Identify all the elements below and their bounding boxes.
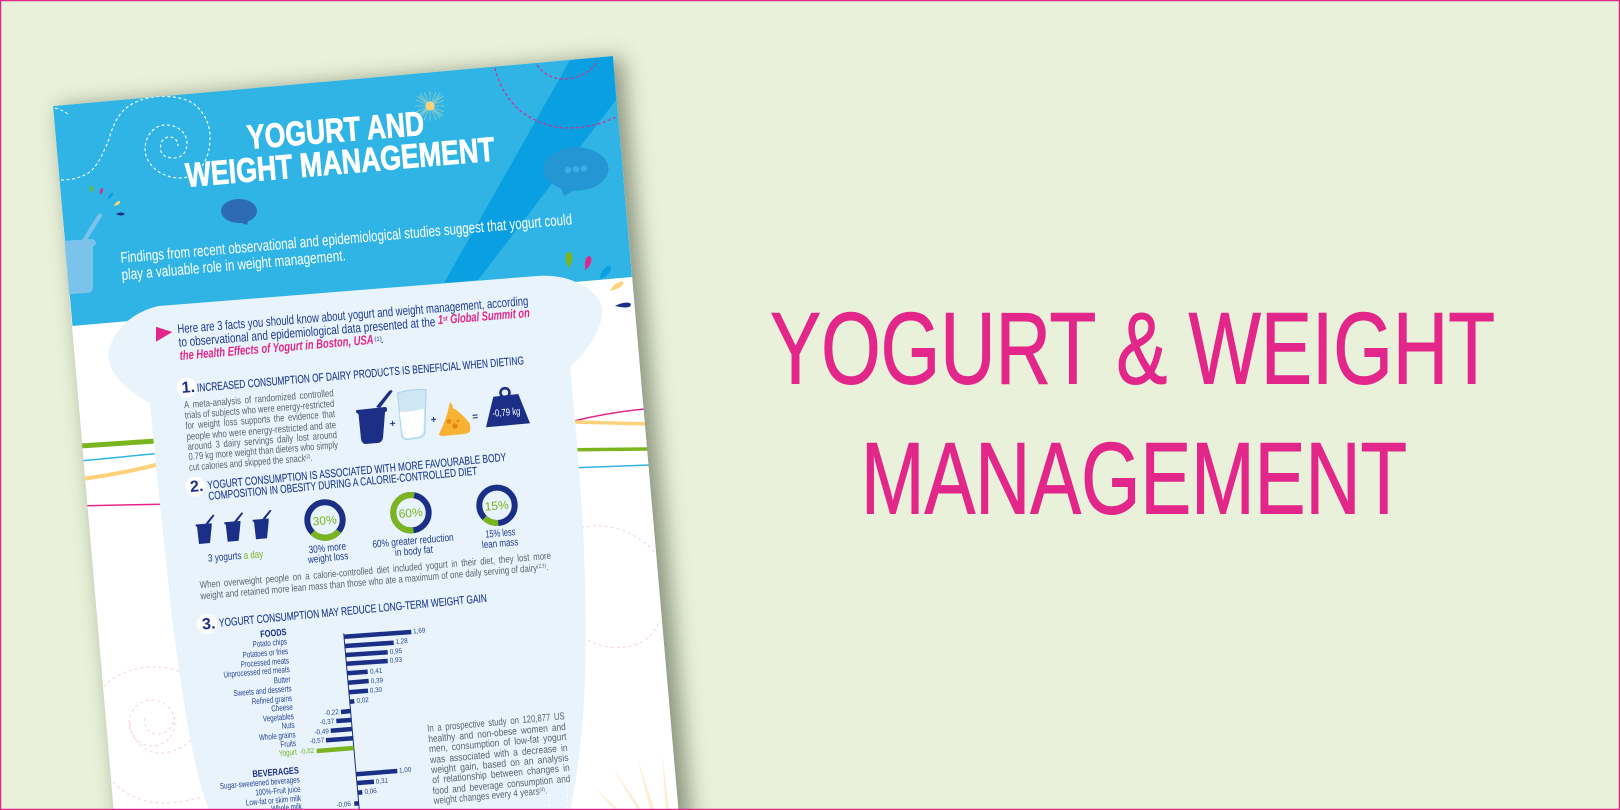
- intro text: to observational and epidemiological data presented at the: [178, 314, 436, 350]
- category labels: FOODS: [260, 626, 287, 639]
- number 1: 1.: [181, 379, 196, 397]
- text block 1: 0.79 kg more weight than dieters who simply: [188, 440, 338, 463]
- bar values: -0,22: [324, 709, 339, 717]
- icon: pale yogurt pot: [64, 214, 102, 294]
- icon: cheese: [439, 402, 470, 436]
- category labels: Sugar-sweetened beverages: [219, 774, 300, 791]
- donut 60%: [391, 493, 431, 533]
- category labels: 100%-Fruit juice: [255, 784, 301, 798]
- label: 3 yogurts a day: a day: [243, 548, 264, 562]
- bar values: 0,31: [376, 777, 389, 786]
- bar values: -0,57: [310, 737, 325, 746]
- subtitle: [120, 211, 573, 284]
- category labels: Potato chips: [252, 636, 288, 649]
- sun: [415, 91, 445, 121]
- page shadow: [60, 58, 692, 810]
- text block 2: weight and retained more lean mass than those who ate a maximum of one daily serving of dairy: [200, 556, 627, 602]
- category labels: [219, 626, 302, 810]
- subtitle: Findings from recent observational and epidemiological studies suggest that yogurt could: [120, 211, 573, 267]
- category labels: Butter: [273, 674, 291, 686]
- bar values: 1,69: [413, 627, 426, 636]
- category labels: Processed meats: [240, 655, 290, 670]
- main title: [770, 292, 1495, 536]
- text block 1: [184, 388, 338, 474]
- intro text: 1: [437, 312, 446, 327]
- panel: tilted infographic poster: [53, 56, 679, 810]
- section 2: [185, 452, 552, 602]
- label 30%: 30% more: [308, 540, 347, 556]
- label 30%: [307, 540, 349, 566]
- text block 3: healthy and non-obese women and: [428, 722, 566, 745]
- donut 15%: 15%: [484, 498, 510, 514]
- faint dashed spirals on white: [104, 526, 660, 803]
- icon: speech bubble right: [544, 147, 608, 196]
- icon: weight: [486, 388, 530, 427]
- bar values: -0,06: [336, 801, 351, 809]
- small dashed corner arc: [55, 108, 69, 115]
- sunburst bottom right: [593, 752, 669, 810]
- dashed white spiral: [61, 96, 210, 180]
- donut 15%: [478, 486, 516, 524]
- label 15%: lean mass: [482, 536, 519, 551]
- category labels: Nuts: [281, 720, 295, 731]
- bar values: [300, 627, 426, 809]
- icon: weight: -0,79 kg: [492, 406, 521, 420]
- label 60%: in body fat: [395, 544, 433, 559]
- text block 2: (2,3): [537, 563, 546, 570]
- bar values: 0,30: [370, 686, 383, 695]
- intro text: st: [443, 316, 448, 323]
- plus: +: [389, 419, 396, 430]
- text block 3: (4): [539, 787, 545, 793]
- subtitle: play a valuable role in weight management.: [121, 247, 346, 284]
- bar chart: [219, 626, 426, 810]
- text block 1: .: [310, 453, 313, 464]
- text block 1: for weight loss supports the evidence that: [185, 409, 336, 432]
- intro text: Global Summit on: [447, 305, 530, 327]
- category labels: BEVERAGES: [252, 764, 299, 779]
- white dashes at pot bottom: [547, 783, 568, 810]
- intro text: .: [379, 331, 384, 346]
- icon: three yogurts: [196, 510, 272, 544]
- icon: yogurt pot: [356, 390, 392, 444]
- title: WEIGHT MANAGEMENT: [184, 131, 496, 195]
- bar values: 1,00: [399, 766, 412, 775]
- number 3: [197, 614, 217, 634]
- intro block: [156, 293, 530, 363]
- text block 1: trials of subjects who were energy-restricted: [184, 399, 335, 422]
- heading 1: INCREASED CONSUMPTION OF DAIRY PRODUCTS IS BENEFICIAL WHEN DIETING: [197, 355, 524, 395]
- bar values: 1,28: [395, 638, 408, 646]
- plus: +: [430, 415, 437, 426]
- icon: speech bubble navy: [221, 199, 257, 225]
- category labels: Vegetables: [262, 711, 294, 724]
- category labels: Sweets and desserts: [233, 683, 292, 698]
- coloured lines left: [80, 441, 162, 506]
- intro text: the Health Effects of Yogurt in Boston, USA: [179, 332, 374, 363]
- bar values: -0,37: [320, 718, 335, 727]
- category labels: Fruits: [280, 738, 297, 750]
- heading 2: YOGURT CONSUMPTION IS ASSOCIATED WITH MORE FAVOURABLE BODY: [207, 452, 507, 492]
- text block 1: cut calories and skipped the snack: [189, 450, 342, 474]
- number 3: 3.: [201, 615, 216, 633]
- intro text: (1): [374, 336, 382, 343]
- category labels: Unprocessed red meats: [223, 664, 290, 680]
- text block 3: weight changes every 4 years: [433, 784, 566, 807]
- donut 30%: [300, 495, 350, 545]
- category labels: Potatoes or fries: [242, 646, 289, 660]
- label: 3 yogurts a day: [208, 550, 263, 564]
- number 1: [177, 378, 197, 398]
- title: YOGURT AND: [246, 105, 426, 157]
- chart axis: [344, 633, 360, 810]
- bar values: -0,49: [314, 728, 329, 737]
- text block 3: .: [545, 786, 548, 797]
- heading 3: YOGURT CONSUMPTION MAY REDUCE LONG-TERM WEIGHT GAIN: [218, 593, 487, 630]
- bar values: 0,41: [370, 667, 383, 676]
- category labels: Cheese: [271, 702, 293, 714]
- header blue band: [53, 56, 632, 326]
- donut 60%: 60%: [398, 505, 424, 521]
- icon: milk glass: [398, 389, 426, 440]
- icon: small paint drops: [90, 186, 124, 216]
- text block 2: .: [546, 562, 549, 573]
- text block 2: When overweight people on a calorie-controlled diet included yogurt in their diet, they lost more: [199, 551, 552, 591]
- label: 3 yogurts a day: 3 yogurts: [208, 550, 242, 565]
- text block 3: food and beverage consumption and: [432, 774, 571, 797]
- poster sheet: [53, 56, 679, 810]
- equals: =: [472, 412, 479, 423]
- text block 1: people who were energy-restricted and ate: [186, 420, 337, 443]
- bar values: 0,06: [364, 788, 377, 796]
- category labels: Whole grains: [259, 729, 296, 743]
- donut 30%: 30%: [312, 513, 338, 528]
- text block 3: of relationship between changes in: [432, 763, 570, 786]
- pink dashed arcs top right: [495, 60, 618, 128]
- bar values: 0,02: [356, 697, 369, 705]
- text block 3: men, consumption of low-fat yogurt: [429, 732, 567, 755]
- text block 1: (2): [305, 454, 311, 460]
- icon: pink triangle: [156, 327, 172, 342]
- category labels: Refined grains: [251, 693, 293, 707]
- heading 2: COMPOSITION IN OBESITY DURING A CALORIE-CONTROLLED DIET: [208, 466, 478, 503]
- text block 3: was associated with a decrease in: [429, 743, 568, 766]
- section 1: [177, 355, 530, 474]
- bar values: 0,93: [390, 656, 403, 665]
- dark diagonal stripe: [444, 56, 616, 283]
- intro text: Here are 3 facts you should know about yogurt and weight management, according: [177, 293, 529, 336]
- intro text: [177, 293, 530, 363]
- category labels: Low-fat or skim milk: [245, 793, 302, 808]
- text block 1: A meta-analysis of randomized controlled: [184, 388, 334, 411]
- main title: MANAGEMENT: [861, 422, 1407, 536]
- bar values: 0,39: [371, 677, 384, 685]
- title: [184, 112, 494, 187]
- number 2: 2.: [189, 478, 204, 496]
- section 3: [197, 593, 571, 810]
- icon: large paint drops: [566, 252, 631, 307]
- label 15%: 15% less: [485, 526, 516, 541]
- text block 3: weight gain, based on an analysis: [430, 753, 569, 776]
- bar values: -0,82: [300, 747, 315, 756]
- category labels: Yogurt: [279, 747, 298, 758]
- bars: [317, 632, 411, 804]
- text block 3: In a prospective study on 120,877 US: [427, 711, 565, 735]
- coloured lines right: [574, 408, 650, 468]
- text block 1: around 3 dairy servings daily lost around: [187, 430, 337, 453]
- bar values: 0,95: [390, 648, 403, 656]
- label 60%: [372, 532, 454, 559]
- label 60%: 60% greater reduction: [372, 532, 454, 551]
- label 15%: [482, 526, 519, 551]
- number 2: [185, 477, 205, 497]
- label 30%: weight loss: [307, 550, 349, 566]
- text block 3: [427, 711, 571, 807]
- body pot shape: [109, 276, 602, 810]
